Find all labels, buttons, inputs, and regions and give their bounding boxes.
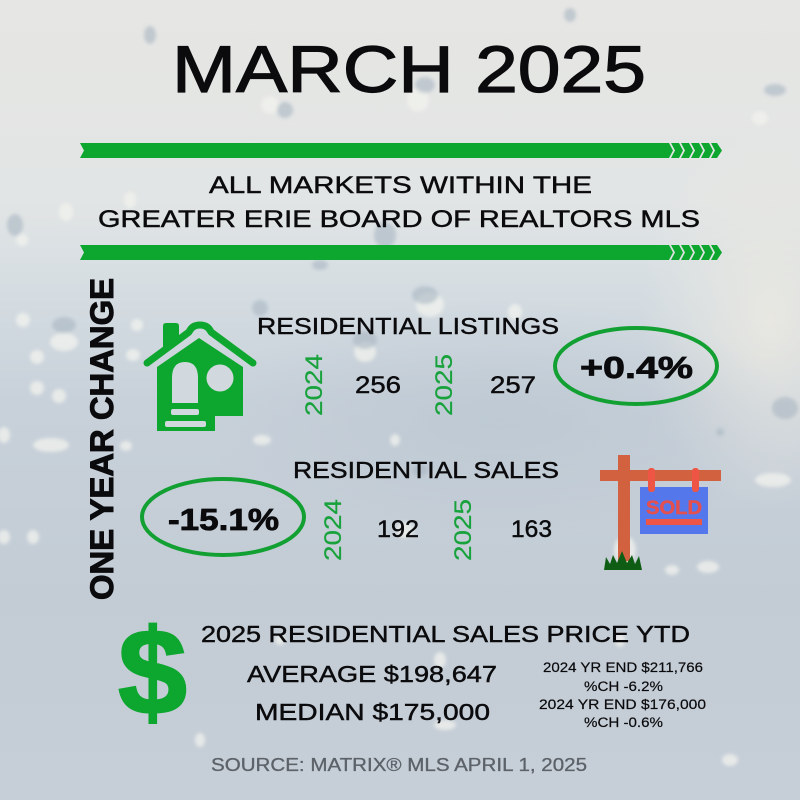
bottom green arrow banner	[80, 245, 722, 260]
value: 192: 192	[377, 516, 419, 543]
callout: +0.4%: +0.4%	[580, 350, 693, 385]
value: 257: 257	[490, 372, 536, 399]
value: 163: 163	[511, 516, 552, 543]
average price: AVERAGE $198,647	[247, 661, 497, 687]
heading: sales price ytd: 2025 RESIDENTIAL SALES PRICE YTD	[201, 621, 690, 647]
year label: 2025: 2025	[450, 499, 477, 561]
icon: sold sign	[600, 455, 721, 570]
section: residential sales	[293, 457, 559, 561]
average comparison: 2024 YR END $211,766	[543, 660, 703, 675]
section: residential listings	[257, 313, 559, 416]
callout: +0.4%	[555, 328, 717, 404]
heading: residential sales: RESIDENTIAL SALES	[293, 457, 559, 483]
icon: house	[147, 323, 253, 431]
icon: sold sign: SOLD	[646, 498, 702, 519]
year label: 2024: 2024	[320, 499, 347, 561]
median comparison: %CH -0.6%	[584, 715, 663, 730]
value: 256: 256	[355, 372, 401, 399]
subtitle: ALL MARKETS WITHIN THE	[209, 172, 592, 199]
median comparison	[539, 697, 706, 730]
callout: -15.1%: -15.1%	[168, 502, 279, 537]
icon: dollar sign: $	[118, 604, 187, 740]
title: MARCH 2025	[172, 32, 646, 106]
callout: -15.1%	[142, 479, 304, 555]
top green arrow banner	[80, 143, 722, 158]
vertical label: one year change: ONE YEAR CHANGE	[84, 278, 120, 600]
subtitle: GREATER ERIE BOARD OF REALTORS MLS	[98, 206, 700, 233]
year label: 2025: 2025	[431, 354, 458, 416]
median price: MEDIAN $175,000	[255, 699, 490, 725]
section: sales price	[201, 621, 706, 730]
heading: residential listings: RESIDENTIAL LISTINGS	[257, 313, 559, 339]
source line: SOURCE: MATRIX® MLS APRIL 1, 2025	[211, 755, 587, 775]
median comparison: 2024 YR END $176,000	[539, 697, 706, 712]
average comparison: %CH -6.2%	[584, 679, 663, 694]
average comparison	[543, 660, 703, 694]
subtitle	[98, 172, 700, 233]
year label: 2024: 2024	[301, 354, 328, 416]
